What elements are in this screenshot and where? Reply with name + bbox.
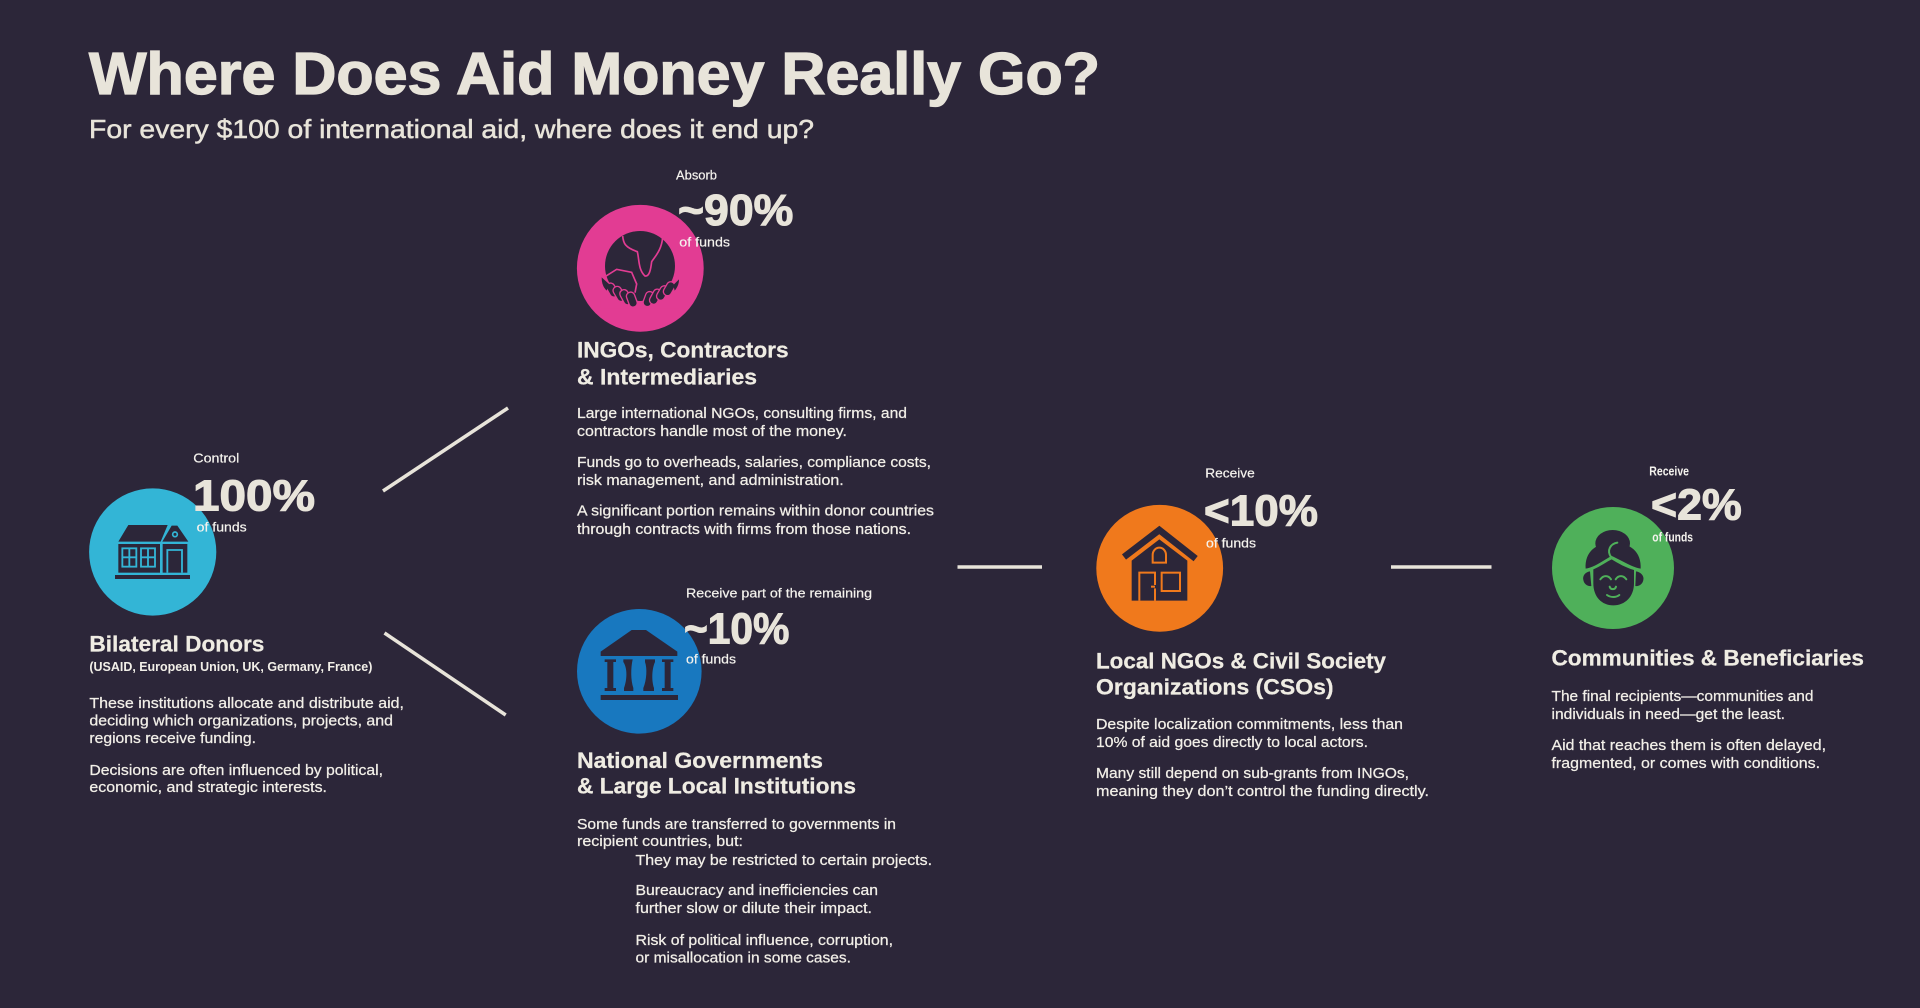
heading: local NGOs (1096, 648, 1387, 700)
text block: communities description: fragmented, or comes with conditions. (1552, 755, 1820, 772)
stat: <10% of funds (1204, 466, 1318, 551)
list: governments caveats: Bureaucracy and inefficiencies can (636, 882, 878, 899)
subtitle: For every $100 of international aid, where does it end up? (89, 114, 814, 144)
text block: local NGOs description: meaning they don’t control the funding directly. (1096, 783, 1429, 800)
list: governments caveats: or misallocation in some cases. (636, 950, 851, 966)
icon: cyan circle with house (89, 488, 216, 616)
stat: <10% of funds: Receive (1205, 466, 1255, 481)
text block: donors description: regions receive funding. (89, 730, 256, 747)
text block: INGOs description: A significant portion remains within donor countries (577, 502, 934, 520)
text block: donors description: economic, and strategic interests. (89, 779, 327, 796)
text block: INGOs description (577, 405, 934, 538)
stat: ~10% of funds: ~10% (684, 604, 789, 653)
panel: INGOs, contractors and intermediaries (577, 167, 934, 538)
stat: 100% of funds (193, 451, 315, 535)
text block: donors description: These institutions allocate and distribute aid, (89, 695, 404, 712)
text block: donors description: Decisions are often influenced by political, (89, 762, 383, 779)
text block: governments intro: Some funds are transferred to governments in (577, 816, 896, 833)
stat: ~90% of funds: of funds (679, 235, 731, 250)
stat: 100% of funds: of funds (197, 520, 247, 535)
text block: INGOs description: risk management, and administration. (577, 472, 844, 489)
heading: local NGOs: Organizations (CSOs) (1096, 674, 1334, 700)
text block: local NGOs description: 10% of aid goes directly to local actors. (1096, 734, 1368, 751)
heading: local NGOs: Local NGOs & Civil Society (1096, 648, 1387, 674)
text block: local NGOs description (1096, 716, 1429, 800)
stat: ~10% of funds: Receive part of the remaining (686, 586, 872, 601)
stat: <2% of funds: of funds (1652, 530, 1693, 545)
heading: bilateral donors: Bilateral Donors (89, 632, 264, 656)
arrow: donors to governments (384, 633, 506, 715)
list: governments caveats: further slow or dilute their impact. (636, 900, 872, 917)
stat: <2% of funds: <2% (1651, 480, 1742, 529)
text block: INGOs description: contractors handle most of the money. (577, 423, 847, 440)
icon: blue circle with government building (577, 609, 702, 734)
stat: <2% of funds: Receive (1649, 464, 1689, 479)
heading: INGOs: & Intermediaries (577, 364, 757, 390)
text block: governments intro (577, 816, 896, 850)
arrow: intermediaries to local NGOs (958, 565, 1042, 569)
list: governments caveats: They may be restricted to certain projects. (636, 852, 932, 869)
list: governments caveats: Risk of political influence, corruption, (636, 932, 893, 949)
stat: <10% of funds: of funds (1206, 536, 1257, 551)
icon: pink circle with hands holding globe (577, 205, 704, 332)
panel: national governments (577, 586, 932, 966)
stat: 100% of funds: 100% (193, 472, 315, 521)
text block: communities description: Aid that reaches them is often delayed, (1552, 737, 1826, 754)
stat: 100% of funds: Control (193, 451, 239, 466)
heading: communities: Communities & Beneficiaries (1552, 646, 1864, 670)
text block: communities description: individuals in need—get the least. (1552, 706, 1785, 723)
title: Where Does Aid Money Really Go? (89, 41, 1100, 107)
heading: national governments: & Large Local Institutions (577, 774, 856, 798)
stat: <10% of funds: <10% (1204, 487, 1318, 536)
heading: INGOs: INGOs, Contractors (577, 338, 789, 362)
panel: bilateral donors (89, 451, 404, 796)
icon: green circle with face (1552, 507, 1674, 629)
stat: ~90% of funds: Absorb (676, 167, 717, 182)
text block: INGOs description: through contracts with firms from those nations. (577, 521, 911, 538)
arrow: donors to INGOs (383, 408, 508, 491)
list: governments caveats (636, 852, 932, 966)
arrow: local NGOs to communities (1391, 565, 1492, 569)
heading: national governments: National Governments (577, 748, 823, 773)
heading: INGOs (577, 338, 789, 390)
panel: communities and beneficiaries (1552, 464, 1864, 772)
stat: ~90% of funds (676, 167, 793, 250)
stat: ~10% of funds (684, 586, 872, 666)
stat: <2% of funds (1649, 464, 1742, 545)
text block: communities description: The final recipients—communities and (1552, 688, 1814, 705)
text block: donors description: deciding which organizations, projects, and (89, 712, 393, 730)
text block: governments intro: recipient countries, but: (577, 833, 743, 850)
text block: INGOs description: Funds go to overheads, salaries, compliance costs, (577, 454, 931, 471)
icon: orange circle with house (1096, 505, 1223, 632)
stat: ~10% of funds: of funds (686, 651, 737, 666)
text block: donors description (89, 695, 404, 796)
text block: local NGOs description: Despite localization commitments, less than (1096, 716, 1403, 733)
stat: ~90% of funds: ~90% (678, 186, 793, 235)
text block: local NGOs description: Many still depend on sub-grants from INGOs, (1096, 765, 1409, 782)
subheading: donor list: (USAID, European Union, UK, Germany, France) (89, 660, 372, 674)
text block: INGOs description: Large international NGOs, consulting firms, and (577, 405, 907, 422)
heading: national governments (577, 748, 856, 798)
panel: local NGOs and CSOs (1096, 466, 1429, 800)
text block: communities description (1552, 688, 1826, 772)
